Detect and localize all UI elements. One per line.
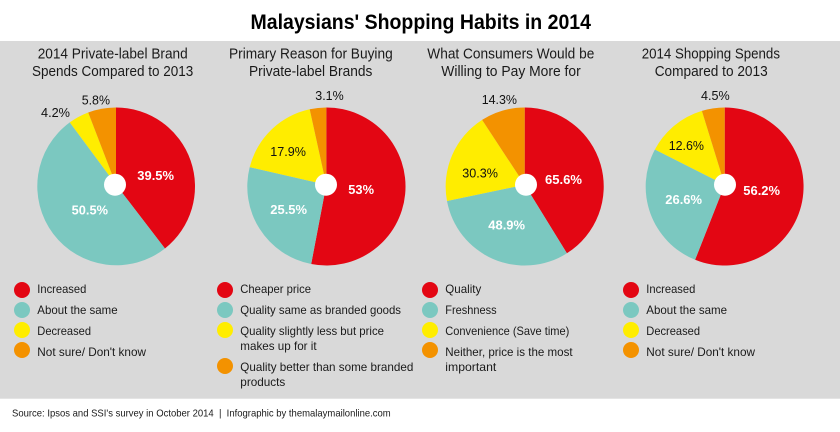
heading: willing to pay more for: What Consumers Would be bbox=[427, 47, 594, 63]
source footer: Source: Ipsos and SSI's survey in October 2014 | Infographic by themalaymailonline.com bbox=[12, 408, 391, 420]
pie chart: primary reason for buying bbox=[247, 89, 406, 265]
panel: private-label brand spends bbox=[14, 47, 195, 359]
heading: private-label brand spends: Spends Compared to 2013 bbox=[32, 64, 193, 80]
pie chart: private-label brand spends: 50.5% bbox=[72, 204, 108, 218]
pie chart: primary reason for buying: 53% bbox=[348, 183, 374, 197]
legend: shopping spends: Increased bbox=[646, 282, 695, 296]
legend: shopping spends: Not sure/ Don't know bbox=[646, 345, 755, 359]
panel: primary reason for buying bbox=[217, 47, 413, 389]
legend: shopping spends bbox=[623, 282, 755, 359]
heading: willing to pay more for bbox=[427, 47, 594, 80]
legend: private-label brand spends: Increased bbox=[37, 282, 86, 296]
legend: willing to pay more for: Neither, price is the most bbox=[445, 345, 573, 359]
legend: shopping spends: Decreased bbox=[646, 324, 700, 338]
pie chart: shopping spends: 26.6% bbox=[665, 193, 702, 207]
heading: primary reason for buying bbox=[229, 47, 393, 80]
pie chart: primary reason for buying: 25.5% bbox=[270, 203, 307, 217]
pie chart: willing to pay more for bbox=[446, 93, 604, 266]
legend: primary reason for buying: Quality better than some branded bbox=[240, 360, 413, 374]
pie chart: willing to pay more for: 65.6% bbox=[545, 173, 582, 187]
heading: private-label brand spends bbox=[32, 47, 193, 80]
legend: willing to pay more for bbox=[422, 282, 573, 374]
title: Malaysians' Shopping Habits in 2014 bbox=[250, 11, 591, 34]
pie chart: shopping spends bbox=[646, 89, 804, 265]
legend: shopping spends: About the same bbox=[646, 303, 727, 317]
legend: private-label brand spends: Not sure/ Don't know bbox=[37, 345, 146, 359]
pie chart: private-label brand spends: 39.5% bbox=[137, 169, 174, 183]
legend: willing to pay more for: important bbox=[445, 360, 497, 374]
legend: primary reason for buying bbox=[217, 282, 413, 389]
legend: willing to pay more for: Quality bbox=[445, 282, 481, 296]
legend: private-label brand spends: About the same bbox=[37, 303, 118, 317]
legend: private-label brand spends: Decreased bbox=[37, 324, 91, 338]
pie chart: willing to pay more for: 30.3% bbox=[462, 166, 498, 180]
pie chart: willing to pay more for: 48.9% bbox=[488, 218, 525, 232]
panel: shopping spends bbox=[623, 47, 804, 359]
legend: willing to pay more for: Convenience (Save time) bbox=[445, 324, 569, 338]
pie chart: willing to pay more for: 14.3% bbox=[482, 93, 517, 107]
heading: shopping spends: Compared to 2013 bbox=[655, 64, 768, 80]
pie chart: private-label brand spends bbox=[37, 93, 195, 265]
legend: primary reason for buying: makes up for it bbox=[240, 339, 317, 353]
pie chart: private-label brand spends: 5.8% bbox=[82, 93, 110, 107]
heading: shopping spends: 2014 Shopping Spends bbox=[642, 47, 780, 63]
heading: private-label brand spends: 2014 Private-label Brand bbox=[38, 47, 188, 63]
heading: primary reason for buying: Private-label Brands bbox=[249, 64, 372, 80]
pie chart: private-label brand spends: 4.2% bbox=[41, 106, 70, 120]
pie chart: shopping spends: 12.6% bbox=[669, 139, 704, 153]
heading: shopping spends bbox=[642, 47, 780, 80]
pie chart: shopping spends: 56.2% bbox=[743, 184, 780, 198]
legend: primary reason for buying: products bbox=[240, 375, 285, 389]
panel: willing to pay more for bbox=[422, 47, 604, 374]
legend: primary reason for buying: Cheaper price bbox=[240, 282, 311, 296]
legend: private-label brand spends bbox=[14, 282, 146, 359]
legend: willing to pay more for: Freshness bbox=[445, 303, 497, 317]
pie chart: primary reason for buying: 3.1% bbox=[315, 89, 344, 103]
heading: primary reason for buying: Primary Reason for Buying bbox=[229, 47, 393, 63]
pie chart: shopping spends: 4.5% bbox=[701, 89, 730, 103]
heading: willing to pay more for: Willing to Pay More for bbox=[441, 64, 581, 80]
legend: primary reason for buying: Quality same as branded goods bbox=[240, 303, 401, 317]
pie chart: primary reason for buying: 17.9% bbox=[270, 145, 306, 159]
legend: primary reason for buying: Quality slightly less but price bbox=[240, 324, 384, 338]
